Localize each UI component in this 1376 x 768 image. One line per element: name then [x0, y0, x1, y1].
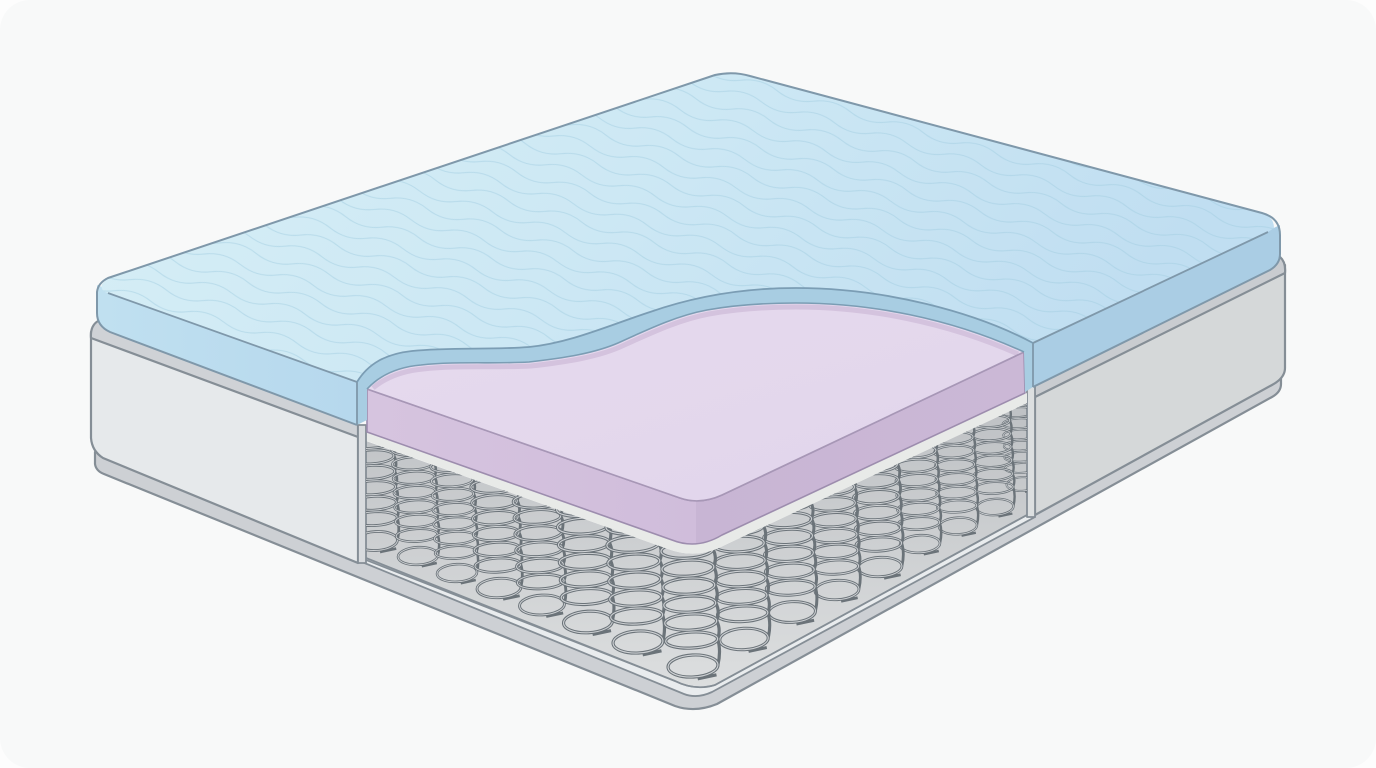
right side panel — [1035, 265, 1285, 515]
cut rim inner edge — [367, 303, 1024, 389]
foam front edges — [108, 232, 1268, 425]
purple front edge — [367, 352, 1024, 501]
illustration: mattress cutaway — [90, 72, 1286, 710]
purple back edge — [373, 307, 1018, 388]
front tray strip — [362, 515, 1035, 696]
white support strip — [367, 393, 1027, 554]
cut rim outer edge — [357, 288, 1033, 382]
blue gel foam layer — [97, 73, 1280, 425]
purple comfort layer — [367, 303, 1025, 544]
left cut post — [358, 425, 366, 563]
mattress base — [91, 257, 1285, 709]
left upper lip band — [91, 321, 358, 437]
right upper lip band — [1033, 257, 1285, 397]
foam outer outline — [97, 73, 1280, 425]
spring cavity — [366, 403, 1027, 687]
right foam side — [1033, 225, 1280, 387]
base lower lip — [95, 365, 1281, 709]
wave texture — [102, 73, 1274, 382]
right cut post — [1027, 385, 1035, 517]
purple top face — [367, 303, 1024, 501]
purple side — [367, 352, 1025, 544]
foam top face — [102, 73, 1274, 382]
innerspring coils — [347, 395, 1040, 680]
left side panel — [91, 325, 358, 563]
cut rim — [357, 288, 1033, 425]
cavity outline — [366, 515, 1027, 687]
left foam side — [97, 285, 357, 425]
